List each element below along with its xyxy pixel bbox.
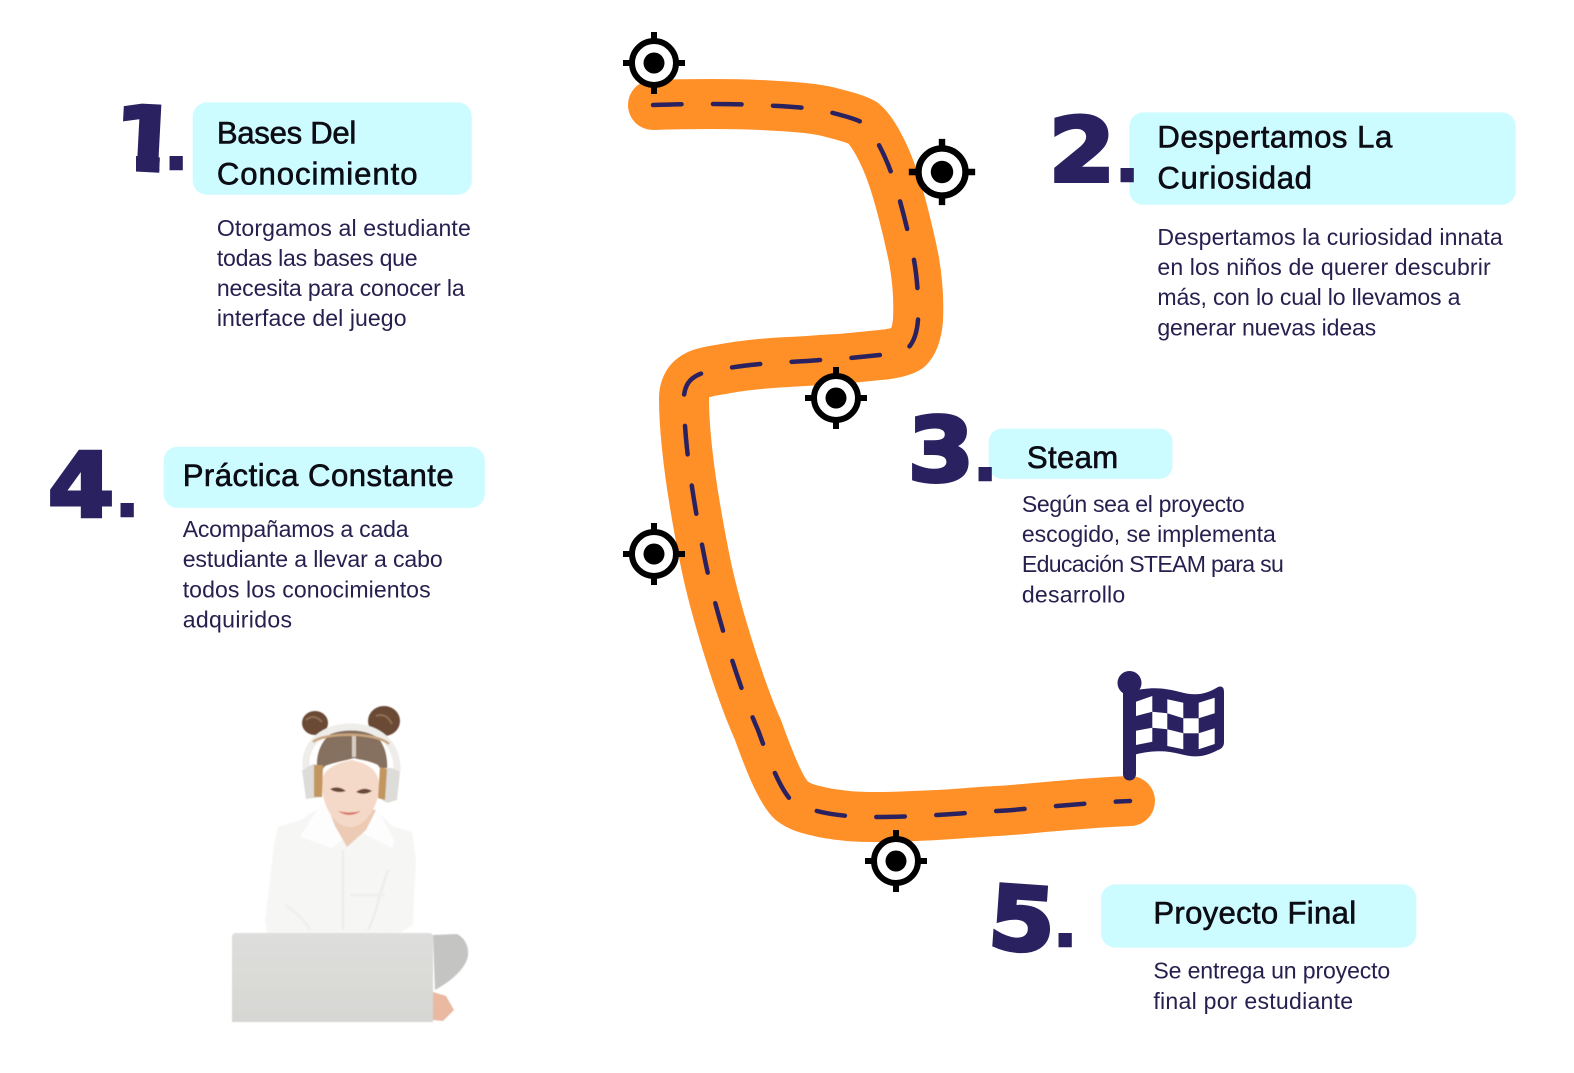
- panel: step 2: [1049, 99, 1516, 340]
- marker 5: [865, 830, 927, 892]
- shirt: [265, 806, 416, 933]
- marker 4: [623, 523, 685, 585]
- body 3: escogido, se implementa: [1022, 521, 1276, 547]
- heading 5: Proyecto Final: [1153, 895, 1356, 930]
- heading 2: Despertamos La: [1157, 120, 1393, 155]
- marker 3: [805, 367, 867, 429]
- body 1: necesita para conocer la: [217, 275, 465, 301]
- foot: [433, 992, 454, 1021]
- panel: step 5: [986, 866, 1416, 1014]
- marker 1: [623, 32, 685, 94]
- body 1: interface del juego: [217, 305, 407, 331]
- pants: [433, 934, 468, 990]
- body 4: estudiante a llevar a cabo: [183, 546, 443, 572]
- panel: step 4: [48, 434, 485, 632]
- number 1 dot: .: [162, 103, 190, 187]
- heading box 3: [989, 429, 1172, 479]
- hair: [317, 726, 387, 778]
- heading box 1: [193, 102, 472, 195]
- eyes: [330, 787, 372, 794]
- number 1: 1: [111, 87, 182, 193]
- number 5 dot: .: [1051, 880, 1079, 964]
- panel: step 3: [908, 399, 1284, 607]
- number 5: 5: [986, 866, 1059, 973]
- mouth: [338, 811, 361, 815]
- number 3 dot: .: [971, 414, 999, 498]
- laptop: [232, 933, 433, 1022]
- heading 1: Bases Del: [217, 116, 356, 151]
- panel: step 1: [111, 87, 472, 331]
- body 4: adquiridos: [183, 606, 292, 632]
- body 4: Acompañamos a cada: [183, 516, 409, 542]
- body 3: Según sea el proyecto: [1022, 491, 1245, 517]
- heading 3: Steam: [1027, 440, 1118, 475]
- heading 2: Curiosidad: [1157, 161, 1312, 196]
- head: [322, 760, 379, 827]
- icon: checkered finish flag: [1118, 671, 1224, 774]
- body 3: Educación STEAM para su: [1022, 551, 1284, 577]
- body 3: desarrollo: [1022, 581, 1125, 607]
- body 2: Despertamos la curiosidad innata: [1157, 224, 1503, 250]
- number 3: 3: [908, 399, 974, 502]
- neck: [327, 805, 376, 847]
- number 4: 4: [48, 434, 114, 537]
- heading box 2: [1129, 112, 1516, 205]
- number 2: 2: [1049, 99, 1115, 202]
- number 4 dot: .: [113, 450, 141, 534]
- headband: [306, 727, 397, 772]
- body 5: Se entrega un proyecto: [1153, 958, 1390, 984]
- body 1: Otorgamos al estudiante: [217, 215, 471, 241]
- heading box 4: [164, 447, 485, 508]
- body 2: más, con lo cual lo llevamos a: [1157, 284, 1461, 310]
- body 2: generar nuevas ideas: [1157, 314, 1376, 340]
- heading 4: Práctica Constante: [183, 458, 454, 493]
- hair buns: [302, 706, 400, 736]
- body 5: final por estudiante: [1153, 988, 1353, 1014]
- body 4: todos los conocimientos: [183, 576, 431, 602]
- body 1: todas las bases que: [217, 245, 418, 271]
- ear cups: [302, 764, 322, 799]
- road path: [653, 104, 1130, 817]
- body 2: en los niños de querer descubrir: [1157, 254, 1491, 280]
- number 2 dot: .: [1113, 115, 1141, 199]
- illustration: girl with headphones and laptop: [232, 706, 468, 1022]
- heading 1: Conocimiento: [217, 157, 418, 192]
- heading box 5: [1101, 884, 1416, 948]
- marker 2: [909, 139, 975, 205]
